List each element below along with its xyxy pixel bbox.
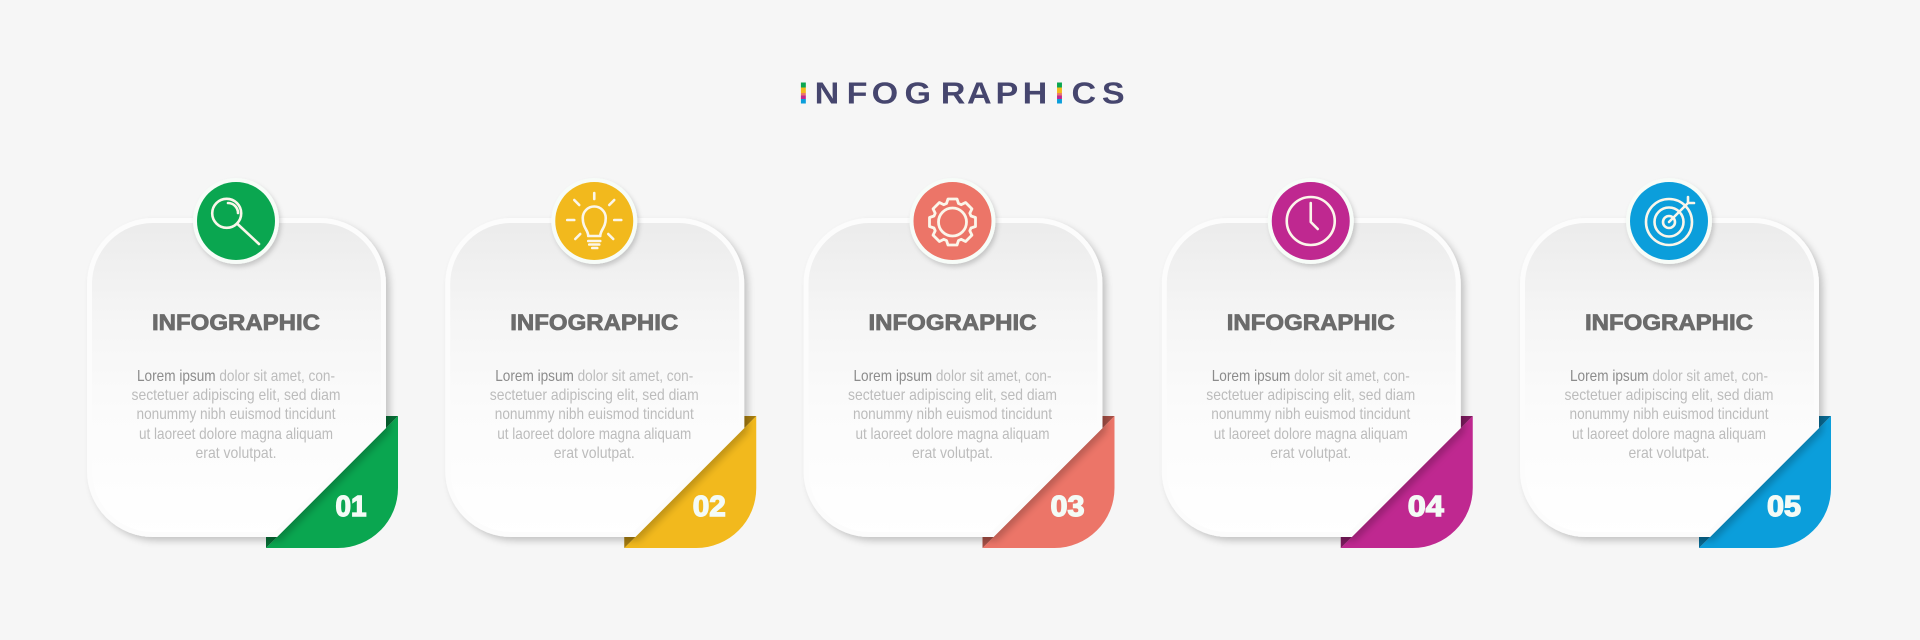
panel: step 04 xyxy=(1164,178,1473,548)
body text: ut laoreet dolore magna aliquam xyxy=(1214,426,1408,443)
body text: nonummy nibh euismod tincidunt xyxy=(853,406,1052,423)
tab: yellow xyxy=(624,416,756,548)
body text: sectetuer adipiscing elit, sed diam xyxy=(490,387,699,404)
body text xyxy=(1206,368,1415,462)
heading: INFOGRAPHIC xyxy=(868,310,1036,335)
body text: sectetuer adipiscing elit, sed diam xyxy=(848,387,1057,404)
icon: light bulb xyxy=(551,178,637,264)
body text: nonummy nibh euismod tincidunt xyxy=(1570,406,1769,423)
body text: erat volutpat. xyxy=(1628,445,1710,462)
tab: green xyxy=(266,416,398,548)
icon: gear xyxy=(910,178,996,264)
heading: INFOGRAPHIC xyxy=(152,310,320,335)
panel: step 01 xyxy=(90,178,398,548)
title: INFOGRAPHICS xyxy=(799,76,1125,110)
body text: sectetuer adipiscing elit, sed diam xyxy=(1564,387,1774,404)
body text: Lorem ipsum dolor sit amet, con- xyxy=(1212,368,1410,385)
heading: INFOGRAPHIC xyxy=(510,310,678,335)
panel: step 03 xyxy=(806,178,1114,548)
number: 05 xyxy=(1767,491,1801,523)
body text: ut laoreet dolore magna aliquam xyxy=(1572,426,1766,443)
icon: target xyxy=(1626,178,1712,264)
body text: Lorem ipsum dolor sit amet, con- xyxy=(495,368,693,385)
number: 04 xyxy=(1408,491,1444,523)
body text: erat volutpat. xyxy=(554,445,635,462)
number: 02 xyxy=(693,491,726,523)
body text: erat volutpat. xyxy=(1270,445,1351,462)
tab: magenta xyxy=(1341,416,1473,548)
card body xyxy=(806,220,1100,535)
body text: nonummy nibh euismod tincidunt xyxy=(136,406,336,423)
body text: sectetuer adipiscing elit, sed diam xyxy=(1206,387,1415,404)
icon: magnifier xyxy=(193,178,279,264)
body text xyxy=(132,368,340,462)
body text: nonummy nibh euismod tincidunt xyxy=(495,406,694,423)
body text: nonummy nibh euismod tincidunt xyxy=(1211,406,1411,423)
body text: erat volutpat. xyxy=(912,445,993,462)
body text: Lorem ipsum dolor sit amet, con- xyxy=(137,368,335,385)
body text: ut laoreet dolore magna aliquam xyxy=(139,426,333,443)
number: 03 xyxy=(1050,491,1084,523)
heading: INFOGRAPHIC xyxy=(1585,310,1753,335)
heading: INFOGRAPHIC xyxy=(1227,310,1395,335)
body text: Lorem ipsum dolor sit amet, con- xyxy=(1570,368,1768,385)
body text: sectetuer adipiscing elit, sed diam xyxy=(132,387,340,404)
body text: Lorem ipsum dolor sit amet, con- xyxy=(854,368,1052,385)
body text xyxy=(490,368,699,462)
body text: ut laoreet dolore magna aliquam xyxy=(856,426,1050,443)
card body xyxy=(1164,220,1458,535)
tab: blue xyxy=(1699,416,1831,548)
panel: step 02 xyxy=(448,178,756,548)
card body xyxy=(448,220,742,535)
card body xyxy=(90,220,384,535)
body text: erat volutpat. xyxy=(196,445,276,462)
body text xyxy=(1564,368,1774,462)
icon: clock xyxy=(1268,178,1354,264)
tab: coral xyxy=(982,416,1114,548)
body text xyxy=(848,368,1057,462)
panel: step 05 xyxy=(1522,178,1831,548)
body text: ut laoreet dolore magna aliquam xyxy=(497,426,691,443)
card body xyxy=(1522,220,1816,535)
number: 01 xyxy=(336,491,366,523)
